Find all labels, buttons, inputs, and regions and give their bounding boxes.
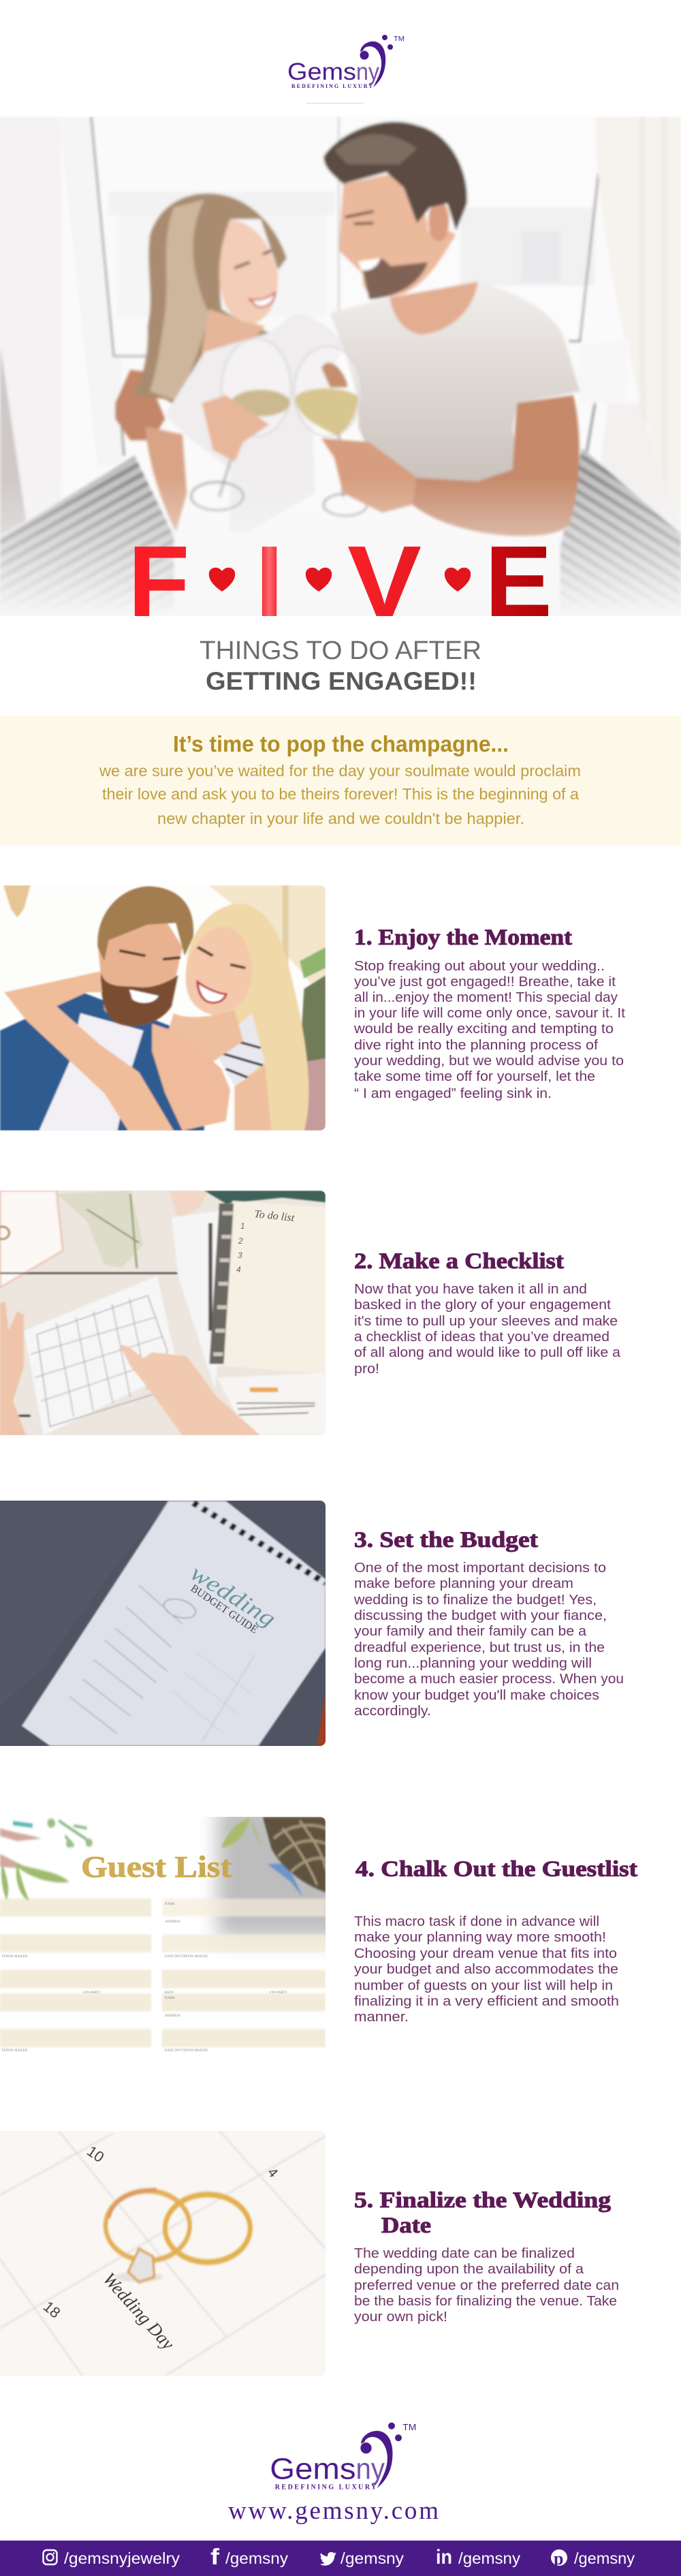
photo 4: guest list: TATION MAILED	[1, 2049, 28, 2053]
photo 2: checklist and calendar: 2	[238, 1236, 243, 1246]
twitter handle: /gemsny	[340, 2549, 405, 2567]
step 3 text: your family and their family can be a	[354, 1624, 587, 1639]
arm over shoulder	[4, 972, 174, 1131]
photo 5: rings on calendar: 4	[264, 2165, 281, 2181]
pinterest handle: /gemsny	[574, 2549, 635, 2567]
step 1 text: take some time off for yourself, let the	[354, 1069, 595, 1084]
photo 5: rings on calendar: 18	[40, 2298, 64, 2322]
man	[97, 923, 183, 1014]
step 3 text: 3. Set the Budget	[354, 1528, 538, 1552]
footer logo: REDEFINING LUXURY	[275, 2483, 377, 2491]
footer logo: Gems	[270, 2452, 355, 2485]
photo 5: rings on calendar	[0, 2131, 326, 2376]
step 3 text: know your budget you'll make choices	[354, 1688, 599, 1703]
photo 2: checklist and calendar: To do list	[254, 1208, 296, 1224]
step 3 text: become a much easier process. When you	[354, 1672, 624, 1687]
step 2 text: of all along and would like to pull off like a	[354, 1345, 621, 1360]
step 4 text	[354, 1857, 637, 2025]
step 5 text: your own pick!	[354, 2310, 447, 2325]
step 3 text: dreadful experience, but trust us, in the	[354, 1640, 605, 1655]
step 5 text	[354, 2188, 619, 2325]
intro panel: new chapter in your life and we couldn't be happier.	[157, 810, 524, 827]
intro panel: we are sure you’ve waited for the day your soulmate would proclaim	[99, 762, 581, 780]
header logo: Gems	[287, 59, 356, 85]
header logo: REDEFINING LUXURY	[291, 83, 373, 89]
big word FIVE with hearts: I	[255, 525, 283, 638]
facebook handle: /gemsny	[225, 2549, 289, 2567]
step 1 text: Stop freaking out about your wedding..	[354, 959, 605, 974]
step 1 text: dive right into the planning process of	[354, 1038, 598, 1053]
footer logo	[270, 2422, 416, 2491]
intro panel	[0, 716, 681, 845]
step 2 text: a checklist of ideas that you’ve dreamed	[354, 1330, 609, 1345]
photo 3: budget guide notebook: BUDGET GUIDE	[189, 1582, 260, 1636]
photo 4: guest list: ADDRESS	[165, 1920, 180, 1924]
jacket and tee	[0, 992, 204, 1131]
man	[331, 285, 580, 482]
step 4 text: make your planning way more smooth!	[354, 1930, 606, 1945]
big word FIVE with hearts: V	[347, 525, 422, 638]
woman's face	[186, 927, 252, 1015]
step 2 text: it's time to pull up your sleeves and make	[354, 1314, 618, 1329]
hero fade	[0, 477, 681, 616]
facebook handle: f	[210, 2544, 220, 2569]
photo 4: guest list: DATE INVITATION MAILED	[165, 2049, 208, 2053]
hero photo: couple toasting	[0, 117, 681, 616]
step 4 text: manner.	[354, 2010, 409, 2025]
step 4 text: 4. Chalk Out the Guestlist	[355, 1857, 637, 1882]
step 1 text: “ I am engaged” feeling sink in.	[354, 1086, 552, 1101]
footer logo: TM	[402, 2422, 416, 2432]
step 3 text: accordingly.	[354, 1704, 431, 1719]
step 1 text: all in...enjoy the moment! This special day	[354, 990, 618, 1005]
step 2 text: pro!	[354, 1362, 379, 1377]
step 1 text: you’ve just got engaged!! Breathe, take it	[354, 975, 616, 990]
photo 4: guest list: TATION MAILED	[1, 1955, 28, 1959]
photo 2: checklist and calendar: 3	[238, 1251, 242, 1260]
linkedin handle: in	[436, 2546, 452, 2569]
header logo: TM	[394, 35, 405, 43]
photo 2: checklist and calendar: 4	[236, 1265, 241, 1274]
step 3 text	[353, 1528, 624, 1719]
step 4 text: This macro task if done in advance will	[354, 1914, 599, 1929]
step 3 text: wedding is to finalize the budget! Yes,	[353, 1593, 597, 1608]
step 1 text: your wedding, but we would advise you to	[354, 1054, 624, 1069]
header logo: ny	[356, 59, 379, 85]
photo 5: rings on calendar: Wedding Day	[99, 2269, 178, 2354]
step 4 text: finalizing it in a very efficient and smooth	[354, 1994, 619, 2009]
photo 2: checklist and calendar	[0, 1191, 326, 1436]
photo 4: guest list: NAME	[165, 1903, 175, 1906]
step 5 text: The wedding date can be finalized	[354, 2246, 575, 2261]
social footer bar	[0, 2541, 681, 2576]
photo 4: guest list: NAME	[165, 1997, 175, 2000]
step 2 text: basked in the glory of your engagement	[354, 1298, 611, 1313]
intro panel: It’s time to pop the champagne...	[173, 731, 509, 756]
woman's hair	[187, 904, 308, 1131]
step 3 text: discussing the budget with your fiance,	[354, 1608, 607, 1623]
step 3 text: make before planning your dream	[354, 1576, 573, 1591]
photo 4: guest list: Guest List	[81, 1850, 232, 1884]
step 1 text: would be really exciting and tempting to	[353, 1022, 614, 1037]
subtitle: GETTING ENGAGED!!	[206, 667, 477, 695]
photo 4: guest list: RSVP	[165, 1991, 174, 1995]
photo 4: guest list: # IN PARTY	[270, 1991, 287, 1995]
step 1 text	[353, 925, 625, 1101]
step 5 text: 5. Finalize the Wedding	[354, 2188, 612, 2213]
footer logo: ny	[355, 2452, 385, 2485]
step 1 text: in your life will come only once, savour it. It	[354, 1006, 625, 1021]
subtitle	[200, 637, 481, 695]
step 2 text	[354, 1249, 621, 1377]
header logo	[287, 35, 405, 89]
instagram handle: /gemsnyjewelry	[64, 2549, 180, 2567]
step 3 text: long run...planning your wedding will	[354, 1656, 592, 1671]
pinterest handle	[551, 2549, 635, 2569]
step 4 text: Choosing your dream venue that fits into	[354, 1946, 617, 1961]
photo 4: guest list	[0, 1817, 326, 2051]
big word FIVE with hearts: F	[128, 525, 189, 638]
photo 3: budget guide notebook	[0, 1501, 326, 1746]
step 4 text: your budget and also accommodates the	[354, 1962, 618, 1977]
facebook handle	[210, 2544, 289, 2569]
photo 4: guest list: ADDRESS	[165, 2014, 180, 2018]
step 2 text: 2. Make a Checklist	[354, 1249, 564, 1274]
woman's shirt	[219, 1013, 266, 1086]
photo 2: checklist and calendar: 1	[240, 1221, 245, 1231]
pinterest handle: p	[554, 2549, 563, 2569]
glasses	[221, 339, 291, 414]
subtitle: THINGS TO DO AFTER	[200, 637, 481, 665]
photo 4: guest list: # IN PARTY	[83, 1991, 101, 1995]
photo 3: budget guide notebook: wedding	[186, 1560, 280, 1632]
woman	[133, 194, 287, 415]
man's hand on woman's shoulder	[115, 370, 165, 440]
step 5 text: be the basis for finalizing the venue. Take	[354, 2294, 617, 2309]
photo 1: happy couple	[0, 885, 326, 1131]
linkedin handle	[436, 2546, 521, 2569]
step 1 text: 1. Enjoy the Moment	[354, 925, 572, 950]
step 4 text: number of guests on your list will help in	[354, 1978, 613, 1993]
step 5 text: Date	[381, 2213, 431, 2238]
big word FIVE with hearts: E	[485, 525, 552, 638]
step 2 text: Now that you have taken it all in and	[354, 1282, 587, 1297]
linkedin handle: /gemsny	[458, 2549, 521, 2567]
photo 4: guest list: DATE INVITATION MAILED	[165, 1955, 208, 1959]
step 5 text: preferred venue or the preferred date can	[354, 2278, 619, 2293]
big word FIVE with hearts	[128, 525, 552, 638]
photo 5: rings on calendar: 10	[84, 2143, 108, 2166]
intro panel: their love and ask you to be theirs forever! This is the beginning of a	[102, 785, 579, 803]
website url: www.gemsny.com	[228, 2497, 439, 2525]
step 5 text: depending upon the availability of a	[354, 2262, 584, 2277]
step 3 text: One of the most important decisions to	[354, 1561, 606, 1576]
